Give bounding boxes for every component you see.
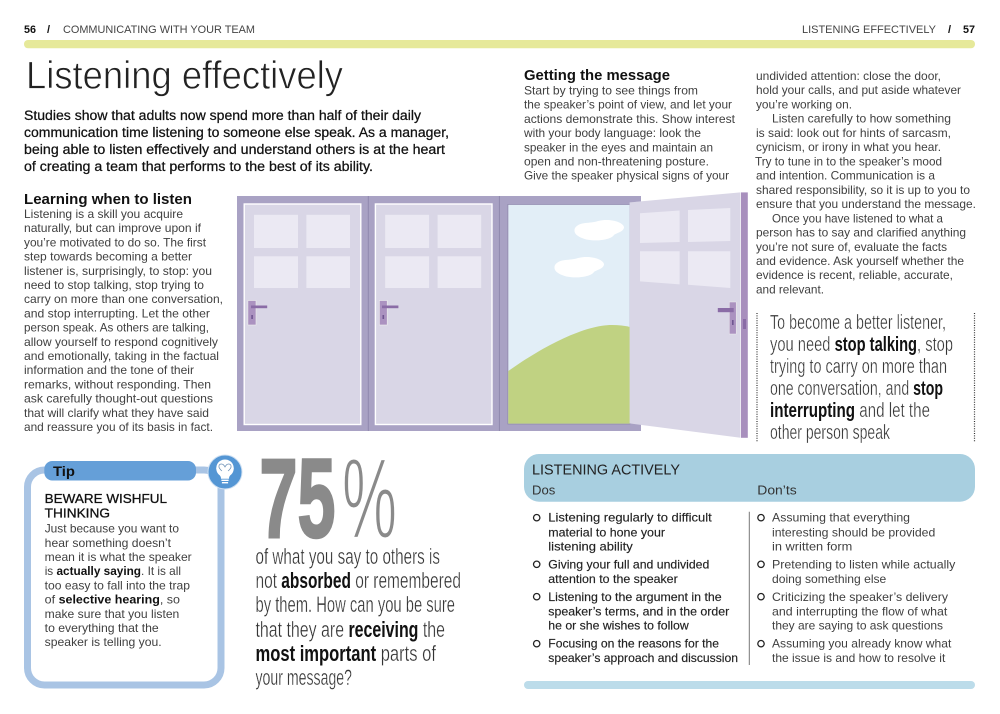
don'ts list: in written form <box>772 539 852 553</box>
statistic caption <box>256 544 461 690</box>
text block: learning when to listen: naturally, but can improve upon if <box>24 221 202 235</box>
view through open doorway <box>508 204 630 424</box>
text block: learning when to listen: and emotionally, taking in the factual <box>24 349 219 363</box>
intro paragraph: of creating a team that performs to the best of its ability. <box>24 159 373 174</box>
panel header: LISTENING ACTIVELY <box>532 462 680 478</box>
text block: second column <box>755 69 976 296</box>
panel footer bar <box>524 681 975 689</box>
dos list: material to hone your <box>548 525 665 539</box>
closed door 1 <box>244 204 361 424</box>
text block: learning when to listen: and stop interrupting. Let the other <box>24 306 210 320</box>
don'ts list: and interrupting the flow of what <box>772 604 948 618</box>
text block: learning when to listen: step towards becoming a better <box>24 250 192 264</box>
pull quote: one conversation, and stop <box>770 378 943 400</box>
pull quote <box>757 312 974 444</box>
text block: second column: undivided attention: close the door, <box>756 69 941 83</box>
dos list: attention to the speaker <box>548 572 678 586</box>
intro paragraph: communication time listening to someone else speak. As a manager, <box>24 125 449 140</box>
door frame <box>237 196 641 431</box>
pull quote: interrupting and let the <box>770 400 930 422</box>
text block: learning when to listen: allow yourself to respond cognitively <box>24 335 218 349</box>
panel: listening actively <box>524 454 975 689</box>
closed door 2 <box>375 204 492 424</box>
intro paragraph: being able to listen effectively and understand others is at the heart <box>24 142 445 157</box>
text block: learning when to listen: you’re motivated to do so. The first <box>24 235 207 249</box>
dos list <box>534 511 738 665</box>
running header right: LISTENING EFFECTIVELY <box>802 24 937 36</box>
text block: learning when to listen <box>24 192 223 434</box>
intro paragraph <box>24 108 449 174</box>
text block: second column: you’re working on. <box>756 98 852 112</box>
statistic caption: not absorbed or remembered <box>256 568 461 593</box>
statistic caption: by them. How can you be sure <box>256 592 455 617</box>
statistic caption: most important parts of <box>256 641 437 666</box>
text block: getting the message: the speaker’s point of view, and let your <box>524 98 732 112</box>
header bar <box>24 40 975 48</box>
don'ts list: the issue is and how to resolve it <box>772 651 946 665</box>
text block: learning when to listen: Listening is a skill you acquire <box>24 207 183 221</box>
dos list: Listening to the argument in the <box>548 590 722 604</box>
text block: learning when to listen: ask carefully thought-out questions <box>24 392 213 406</box>
text block: getting the message <box>523 68 736 183</box>
text block: second column: person has to say and clarified anything <box>756 226 966 240</box>
don'ts list <box>758 511 955 665</box>
tip body text: speaker is telling you. <box>45 635 162 649</box>
statistic caption: your message? <box>256 665 352 690</box>
tip label pill: Tip <box>53 463 75 479</box>
text block: learning when to listen: person speak. As others are talking, <box>24 321 209 335</box>
dos list: listening ability <box>548 539 633 553</box>
tip label pill <box>44 461 196 480</box>
text block: second column: Listen carefully to how something <box>772 112 951 126</box>
intro paragraph: Studies show that adults now spend more than half of their daily <box>24 108 421 123</box>
heading: getting the message: Getting the message <box>524 68 670 84</box>
don'ts list: interesting should be provided <box>772 525 935 539</box>
open door <box>630 192 748 438</box>
running header left: / <box>47 24 50 36</box>
text block: second column: ensure that you understand the message. <box>756 197 976 211</box>
dos list: speaker’s approach and discussion <box>548 651 738 665</box>
dos list: Giving your full and undivided <box>548 558 709 572</box>
title: Listening effectively <box>26 54 343 98</box>
text block: second column: Once you have listened to what a <box>772 211 943 225</box>
tip body text: of selective hearing , so <box>45 593 180 607</box>
text block: getting the message: with your body language: look the <box>523 126 701 140</box>
big statistic: 75 percent: 75 <box>260 436 336 561</box>
panel header <box>524 454 975 502</box>
don'ts list: Pretending to listen while actually <box>772 558 955 572</box>
tip body text: to everything that the <box>45 621 159 635</box>
statistic caption: of what you say to others is <box>256 544 440 569</box>
tip body text: hear something doesn’t <box>45 536 172 550</box>
running header left: 56 <box>24 24 36 36</box>
tip heading: BEWARE WISHFUL <box>45 491 167 506</box>
text block: learning when to listen: information and the tone of their <box>24 363 194 377</box>
dos list: speaker’s terms, and in the order <box>548 604 729 618</box>
text block: second column: is said: look out for hints of sarcasm, <box>756 126 951 140</box>
icon: light bulb <box>208 455 242 489</box>
text block: getting the message: speaker in the eyes and maintain an <box>524 140 713 154</box>
tip body text: too easy to fall into the trap <box>45 578 190 592</box>
text block: getting the message: open and non-threatening posture. <box>524 154 709 168</box>
heading: learning when to listen: Learning when to listen <box>24 192 192 208</box>
tip heading: THINKING <box>45 506 110 520</box>
tip heading <box>45 491 167 520</box>
text block: second column: cynicism, or irony in what you hear. <box>756 140 941 154</box>
tip panel <box>28 455 242 685</box>
tip body text: Just because you want to <box>45 522 179 536</box>
statistic caption: that they are receiving the <box>256 617 445 642</box>
dos list: Listening regularly to difficult <box>548 511 712 525</box>
text block: second column: and evidence. Ask yourself whether the <box>756 254 964 268</box>
running header right: 57 <box>963 24 975 36</box>
don'ts list: they are saying to ask questions <box>772 619 943 633</box>
text block: second column: you’re not sure of, evaluate the facts <box>756 240 947 254</box>
tip body text: make sure that you listen <box>45 607 179 621</box>
text block: getting the message: Start by trying to see things from <box>524 84 698 98</box>
text block: getting the message: actions demonstrate this. Show interest <box>524 112 736 126</box>
text block: learning when to listen: remarks, without responding. Then <box>24 377 211 391</box>
don'ts list: Criticizing the speaker’s delivery <box>772 590 948 604</box>
text block: learning when to listen: carry on more than one conversation, <box>24 292 223 306</box>
text block: learning when to listen: need to stop talking, stop trying to <box>24 278 204 292</box>
pull quote: other person speak <box>770 422 891 444</box>
running header right: / <box>948 24 951 36</box>
dos list: Focusing on the reasons for the <box>548 637 719 651</box>
text block: second column: hold your calls, and put aside whatever <box>756 83 961 97</box>
text block: learning when to listen: and reassure you of its basis in fact. <box>24 420 213 434</box>
tip box outline <box>28 470 221 685</box>
tip body text <box>45 522 192 649</box>
text block: second column: evidence is recent, reliable, accurate, <box>756 268 953 282</box>
text block: second column: shared responsibility, so it is up to you to <box>756 183 970 197</box>
dos list: he or she wishes to follow <box>548 619 689 633</box>
text block: second column: Try to tune in to the speaker’s mood <box>755 154 942 168</box>
don'ts list: Assuming that everything <box>772 511 910 525</box>
panel header: Don’ts <box>757 482 797 497</box>
running header left: COMMUNICATING WITH YOUR TEAM <box>63 24 255 36</box>
panel header: Dos <box>532 482 556 497</box>
text block: second column: and relevant. <box>756 282 824 296</box>
don'ts list: Assuming you already know what <box>772 637 952 651</box>
tip body text: mean it is what the speaker <box>45 550 192 564</box>
illustration: three doors with one open <box>237 192 748 438</box>
text block: second column: and intention. Communication is a <box>756 169 935 183</box>
text block: learning when to listen: that will clarify what they have said <box>24 406 209 420</box>
don'ts list: doing something else <box>772 572 887 586</box>
tip body text: is actually saying. It is all <box>45 564 181 578</box>
text block: learning when to listen: listener is, surprisingly, to stop: you <box>24 264 212 278</box>
text block: getting the message: Give the speaker physical signs of your <box>524 169 729 183</box>
pull quote: you need stop talking, stop <box>770 334 953 356</box>
big statistic: 75 percent: % <box>342 436 397 563</box>
